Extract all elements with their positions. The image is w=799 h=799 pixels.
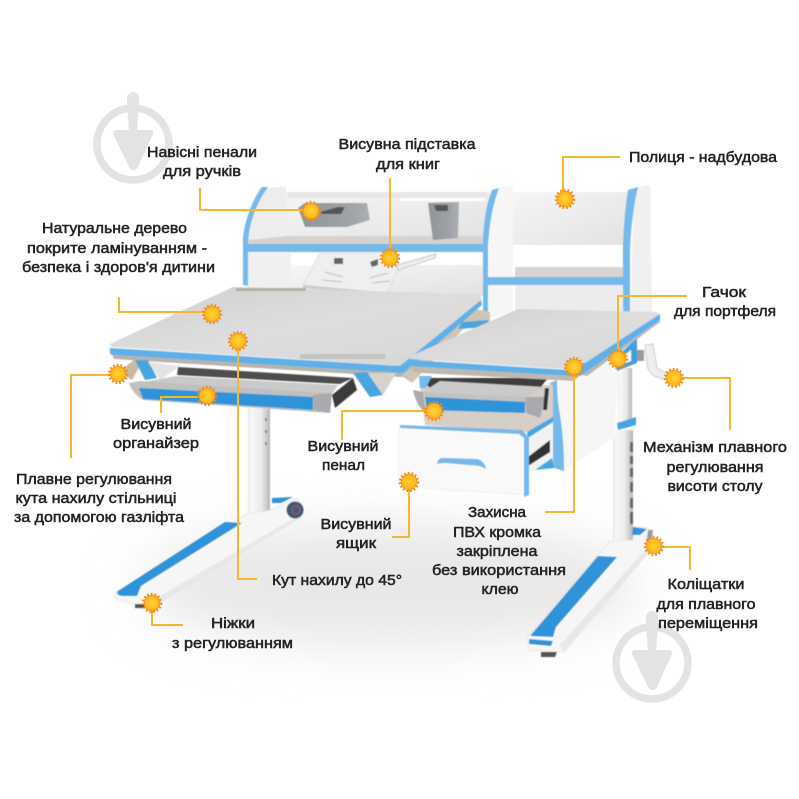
callout: PVC edge: клею bbox=[482, 581, 518, 598]
organizer drawer with brackets bbox=[118, 360, 396, 413]
callout: height mechanism: висоти столу bbox=[668, 478, 763, 495]
callout: PVC edge: Захисна bbox=[468, 504, 527, 521]
watermark: top left bbox=[97, 92, 169, 180]
pen holders bbox=[298, 202, 459, 240]
callout: organizer: Висувний bbox=[120, 416, 192, 433]
callout: organizer bbox=[113, 387, 216, 452]
callout: big drawer: ящик bbox=[336, 535, 376, 552]
left column bbox=[248, 407, 270, 512]
desk illustration bbox=[110, 185, 670, 657]
callout: organizer: органайзер bbox=[113, 435, 199, 452]
callout: pencil cases: для ручків bbox=[163, 163, 241, 180]
shelf with blue edge bbox=[247, 236, 485, 252]
callout: casters bbox=[645, 537, 758, 632]
callout: hook bbox=[609, 284, 776, 368]
left tilting desktop bbox=[110, 287, 490, 383]
callout: tilt gas lift bbox=[14, 365, 185, 526]
callout: tilt angle bbox=[229, 332, 402, 589]
callout: adjustable feet bbox=[143, 594, 293, 652]
callout: height mechanism: регулювання bbox=[666, 459, 764, 476]
callout: tilt gas lift: кута нахилу стільниці bbox=[16, 490, 176, 507]
left hutch side panel bbox=[243, 186, 291, 291]
right foot bbox=[527, 527, 653, 657]
callout: book stand bbox=[338, 136, 476, 267]
callout: hook: для портфеля bbox=[674, 303, 776, 320]
callout: hook: Гачок bbox=[702, 284, 747, 301]
floor shadow bbox=[140, 523, 640, 647]
callout: book stand: для книг bbox=[376, 156, 441, 173]
callout: PVC edge bbox=[432, 358, 583, 598]
callout: shelf bbox=[556, 149, 778, 208]
callout: pencil drawer: пенал bbox=[322, 457, 365, 474]
callout: natural wood: безпека і здоров'я дитини bbox=[22, 259, 215, 276]
callout: book stand: Висувна підставка bbox=[338, 136, 476, 153]
callout: natural wood: покрите ламінуванням - bbox=[27, 240, 207, 257]
callout: pencil drawer bbox=[308, 402, 443, 474]
callout: casters: для плавного bbox=[656, 596, 756, 613]
left foot bbox=[115, 497, 303, 608]
callout: casters: переміщення bbox=[658, 615, 758, 632]
pencil drawer bbox=[413, 376, 549, 418]
callout: PVC edge: ПВХ кромка bbox=[453, 524, 542, 541]
watermark: bottom right bbox=[616, 611, 688, 699]
callout: pencil cases bbox=[147, 144, 320, 220]
callout: PVC edge: закріплена bbox=[456, 543, 538, 560]
right column bbox=[613, 368, 636, 540]
callout: adjustable feet: з регулюванням bbox=[172, 635, 293, 652]
hutch back panels bbox=[287, 192, 630, 312]
callout: tilt angle: Кут нахилу до 45° bbox=[272, 572, 402, 589]
callout: shelf: Полиця - надбудова bbox=[629, 149, 778, 166]
callout: natural wood bbox=[22, 220, 221, 323]
callout: tilt gas lift: за допомогою газліфта bbox=[14, 509, 185, 526]
callout: pencil drawer: Висувний bbox=[308, 438, 378, 455]
callout: tilt gas lift: Плавне регулювання bbox=[16, 471, 172, 488]
callout: pencil cases: Навісні пенали bbox=[147, 144, 257, 161]
height adjustment crank and bracket bbox=[613, 338, 670, 380]
right desktop bbox=[410, 309, 660, 381]
callout: big drawer bbox=[320, 473, 418, 552]
callout: big drawer: Висувний bbox=[320, 516, 392, 533]
callout: adjustable feet: Ніжки bbox=[211, 615, 255, 632]
callout: height mechanism: Механізм плавного bbox=[643, 439, 787, 456]
book stand bbox=[303, 253, 436, 295]
big drawer bbox=[398, 385, 554, 497]
callout: natural wood: Натуральне дерево bbox=[42, 220, 187, 237]
right desk body bbox=[550, 357, 617, 472]
right hutch side panels bbox=[483, 185, 652, 327]
callout: height mechanism bbox=[643, 369, 787, 495]
callout: PVC edge: без використання bbox=[432, 562, 566, 579]
callout: casters: Коліщатки bbox=[668, 576, 744, 593]
